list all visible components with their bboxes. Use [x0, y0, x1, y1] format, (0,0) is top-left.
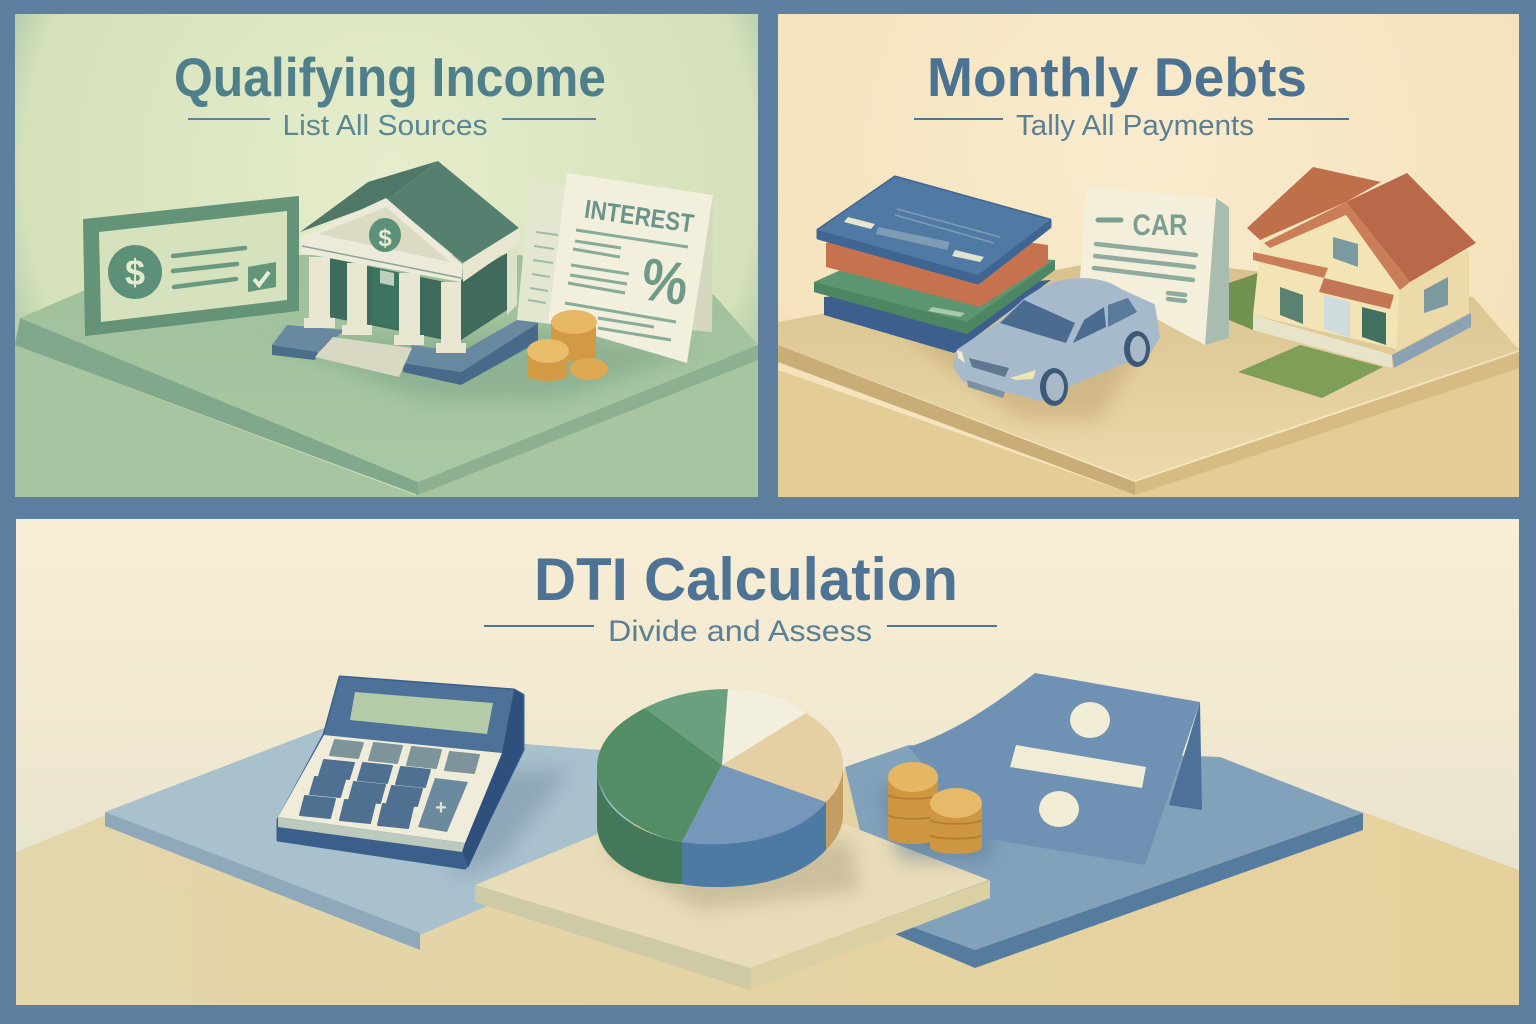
icon: interest document: %: [637, 245, 692, 318]
bank steps: [315, 337, 412, 377]
foundation: [1253, 315, 1392, 368]
calculator keys: [300, 740, 479, 828]
pie side: [597, 768, 682, 884]
green card: [814, 250, 1055, 334]
platform: green floor: [15, 255, 758, 497]
floor: [16, 760, 1519, 1005]
heading: qualifying income: Qualifying Income: [174, 46, 606, 108]
icon: interest document: [517, 173, 713, 363]
hedge: [1229, 272, 1261, 330]
icon: bank: $: [378, 225, 392, 252]
porch eave: [1253, 252, 1328, 278]
platform: blue right: [845, 745, 1363, 968]
icon: interest document: INTEREST: [583, 194, 696, 239]
icon: divide symbol: [909, 673, 1202, 865]
orange card: [826, 225, 1048, 307]
panel: qualifying income: [15, 14, 758, 497]
panel: monthly debts: [778, 14, 1519, 497]
object shadows: [450, 770, 990, 910]
platform: tan floor: [778, 265, 1519, 497]
icon: bank: [272, 161, 538, 385]
walls: [1253, 215, 1400, 350]
bank base: [272, 315, 538, 385]
bank door: [372, 267, 401, 330]
icon: car loan document: [1080, 187, 1229, 345]
platform: beige center: [475, 823, 990, 990]
bank roof: [300, 161, 438, 232]
subheading: list all sources: List All Sources: [282, 110, 488, 142]
bank columns: [304, 257, 466, 353]
icon: house: [1229, 167, 1476, 398]
pie slices: [597, 708, 722, 842]
panel: dti calculation: [16, 519, 1519, 1005]
chart: pie: [597, 689, 843, 887]
lawn: [1238, 345, 1383, 398]
icon: coins: [888, 762, 982, 854]
windows and doors: [1333, 237, 1358, 267]
icon: calculator: +: [435, 797, 447, 819]
icon: paycheck: $: [125, 252, 145, 293]
icon: car: [954, 279, 1159, 406]
subheading: divide and assess: Divide and Assess: [608, 615, 872, 648]
roof: [1247, 167, 1381, 240]
dark blue card: [824, 280, 1051, 353]
icon: paycheck: [84, 197, 298, 335]
blue card: [818, 177, 1050, 283]
icon: stack of cards: [814, 177, 1055, 353]
icon: coins: [527, 310, 608, 381]
icon: calculator: [278, 677, 523, 868]
heading: monthly debts: Monthly Debts: [927, 46, 1307, 108]
heading: dti calculation: DTI Calculation: [534, 546, 958, 613]
icon: car loan document: CAR: [1132, 209, 1188, 242]
platform: blue left: [105, 728, 640, 950]
subheading: tally all payments: Tally All Payments: [1016, 110, 1254, 142]
